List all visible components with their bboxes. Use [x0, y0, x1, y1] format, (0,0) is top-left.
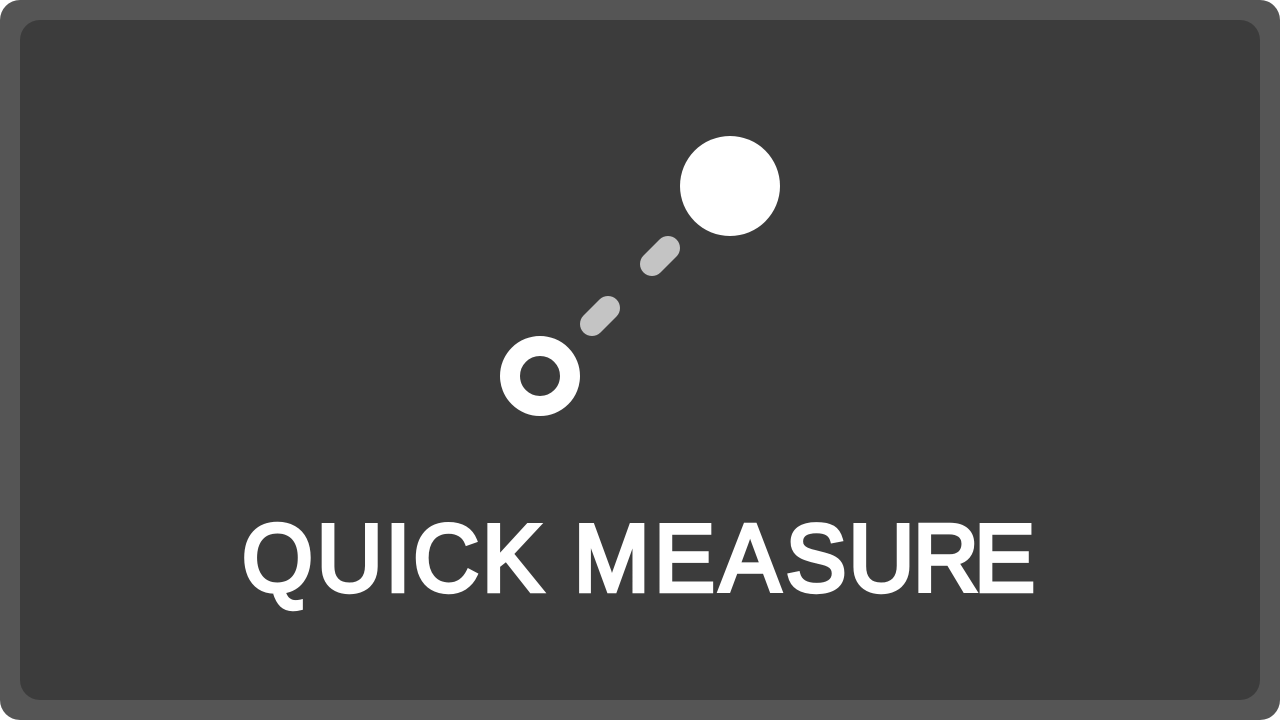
dash: upper: [652, 248, 668, 264]
end point: filled circle: [680, 136, 780, 236]
start point: ring: [510, 346, 570, 406]
dash: lower: [592, 308, 608, 324]
title: QUICK MEASURE: [242, 504, 1035, 612]
icon: measure between two points: [510, 136, 780, 406]
